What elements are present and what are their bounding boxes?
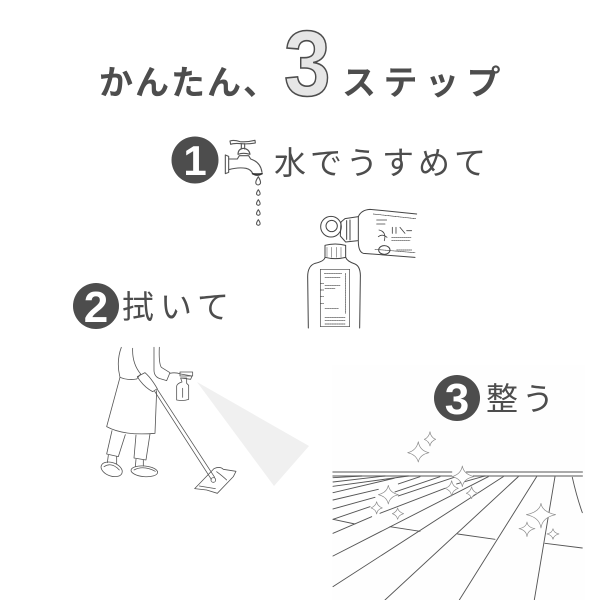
title: ステップ	[342, 64, 508, 102]
spray mist cone	[197, 382, 309, 486]
illustration: shining wooden floor	[333, 432, 582, 600]
illustration: person mopping with spray bottle	[99, 347, 236, 493]
step 3 heading: 3	[445, 375, 469, 424]
step 1 heading: 水でうすめて	[274, 145, 490, 181]
sparkles	[371, 432, 559, 539]
step 2 heading	[73, 283, 235, 332]
floor panel background	[332, 365, 585, 600]
step 3 heading: 整う	[486, 381, 558, 417]
icon: faucet with water drops	[225, 140, 262, 225]
title: かんたん、	[99, 64, 279, 102]
floor lines	[333, 472, 582, 600]
title: 3	[284, 11, 331, 115]
step 1 heading: 1	[183, 137, 207, 184]
title	[99, 11, 508, 115]
step 1 heading	[172, 136, 490, 184]
step 2 heading: 2	[84, 283, 108, 332]
step 3 heading	[434, 375, 558, 424]
illustration: tube pouring into bottle	[308, 209, 417, 328]
step 2 heading: 拭いて	[122, 289, 235, 325]
